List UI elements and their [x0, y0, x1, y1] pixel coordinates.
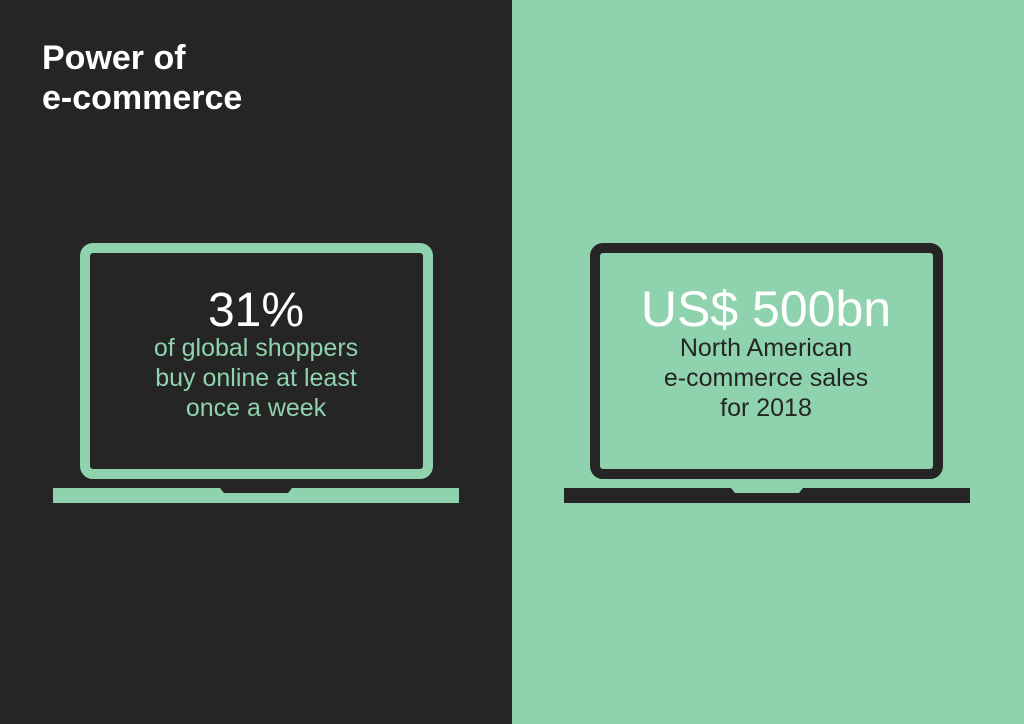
icon: laptop right [564, 248, 970, 503]
panel: right laptop stat [564, 248, 970, 503]
title: e-commerce [42, 79, 242, 117]
text: US$ 500bn stat [641, 281, 891, 422]
text: 31% stat: of global shoppers [154, 334, 358, 362]
title: Power of [42, 39, 186, 77]
text: 31% stat: 31% [208, 284, 304, 337]
icon: laptop left [53, 248, 459, 503]
text: 31% stat [154, 284, 358, 422]
panel: left laptop stat [53, 248, 459, 503]
title [42, 39, 242, 117]
text: US$ 500bn stat: North American [680, 334, 852, 362]
text: US$ 500bn stat: e-commerce sales [664, 364, 868, 392]
text: 31% stat: buy online at least [155, 364, 357, 392]
text: US$ 500bn stat: for 2018 [720, 394, 812, 422]
text: 31% stat: once a week [186, 394, 327, 422]
text: US$ 500bn stat: US$ 500bn [641, 281, 891, 337]
